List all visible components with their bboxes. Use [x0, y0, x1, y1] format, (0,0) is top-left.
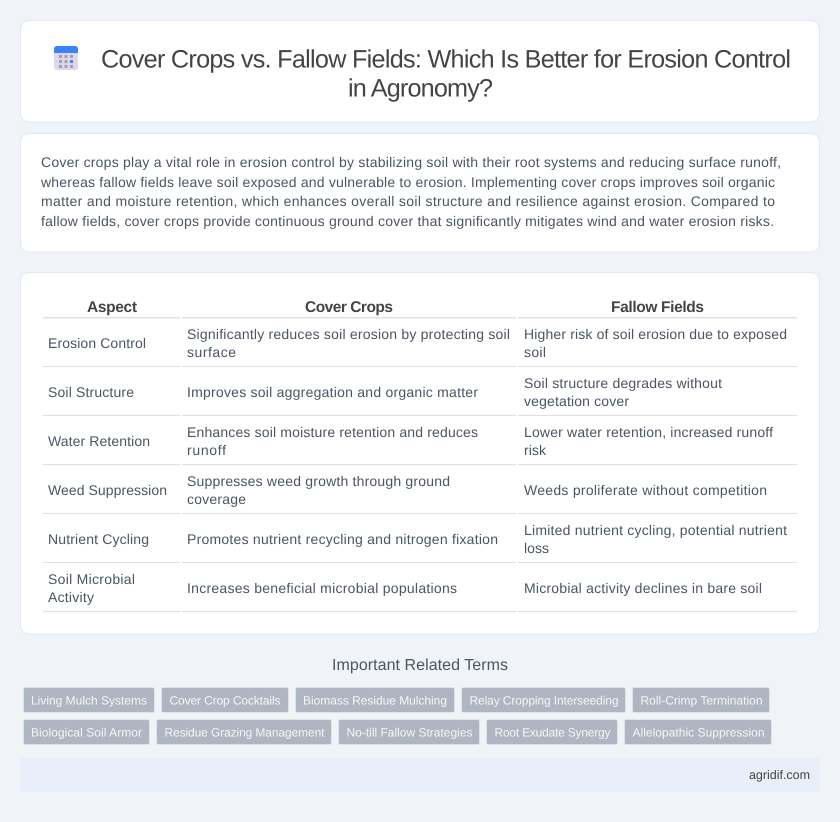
- chip: Root Exudate Synergy: [494, 726, 610, 740]
- chip: [486, 720, 618, 744]
- row: water retention: risk: [524, 442, 547, 458]
- row: nutrient cycling: [48, 522, 787, 556]
- chip: [162, 688, 288, 712]
- row: soil microbial activity: Activity: [48, 589, 94, 605]
- title: Cover Crops vs. Fallow Fields: Which Is Better for Erosion Control: [101, 46, 791, 74]
- row: weed suppression: Weeds proliferate without competition: [524, 482, 767, 498]
- table header row: Fallow Fields: [611, 299, 704, 316]
- row: water retention: [48, 424, 773, 458]
- chip: [24, 720, 150, 744]
- text block: description: whereas fallow fields leave soil exposed and vulnerable to erosion. Implementing cover crops improves soil organic: [40, 174, 775, 190]
- row: weed suppression: [48, 473, 767, 507]
- row: nutrient cycling: loss: [524, 540, 549, 556]
- row: erosion control: [48, 326, 787, 360]
- chip: [156, 720, 332, 744]
- chip: Roll-Crimp Termination: [640, 694, 762, 708]
- panel: comparison table: [20, 272, 820, 634]
- heading: related terms: Important Related Terms: [332, 657, 508, 674]
- row: nutrient cycling: Promotes nutrient recycling and nitrogen fixation: [187, 531, 498, 547]
- chip: Biomass Residue Mulching: [303, 694, 447, 708]
- row: soil microbial activity: Increases beneficial microbial populations: [187, 580, 457, 596]
- table header row: Cover Crops: [305, 299, 393, 316]
- text block: description: matter and moisture retention, which enhances overall soil structure and resilience against erosion. Compared to: [41, 193, 775, 209]
- row: weed suppression: Weed Suppression: [48, 482, 167, 498]
- row: water retention: Lower water retention, increased runoff: [524, 424, 773, 440]
- table rules: [43, 317, 797, 612]
- panel: header: [20, 20, 820, 122]
- row: soil structure: vegetation cover: [524, 393, 629, 409]
- chip: Relay Cropping Interseeding: [470, 694, 618, 708]
- table header row: Aspect: [87, 299, 137, 316]
- chip: [632, 688, 770, 712]
- row: soil microbial activity: [48, 571, 762, 605]
- row: soil structure: Soil Structure: [48, 384, 134, 400]
- icon: calendar: [54, 46, 78, 70]
- chip: [24, 688, 154, 712]
- row: nutrient cycling: Limited nutrient cycling, potential nutrient: [524, 522, 787, 538]
- chip: Allelopathic Suppression: [632, 726, 764, 740]
- chip: Biological Soil Armor: [31, 726, 142, 740]
- chip: [296, 688, 454, 712]
- row: soil structure: Improves soil aggregation and organic matter: [187, 384, 478, 400]
- row: water retention: Water Retention: [48, 433, 150, 449]
- chip: [338, 720, 480, 744]
- footer bar: [20, 758, 820, 792]
- row: weed suppression: coverage: [187, 491, 246, 507]
- table header row: [87, 299, 704, 316]
- text block: description: Cover crops play a vital role in erosion control by stabilizing soil with their root systems and reducing surface runoff,: [41, 154, 781, 170]
- row: soil microbial activity: Microbial activity declines in bare soil: [524, 580, 762, 596]
- row: water retention: Enhances soil moisture retention and reduces: [187, 424, 478, 440]
- text block: description: [40, 154, 781, 229]
- row: erosion control: Significantly reduces soil erosion by protecting soil: [187, 326, 510, 342]
- related term chips: [24, 688, 772, 744]
- row: soil microbial activity: Soil Microbial: [48, 571, 135, 587]
- chip: Residue Grazing Management: [164, 726, 325, 740]
- row: water retention: runoff: [187, 442, 226, 458]
- title: [101, 46, 791, 102]
- row: soil structure: Soil structure degrades without: [524, 375, 722, 391]
- row: weed suppression: Suppresses weed growth through ground: [187, 473, 450, 489]
- row: erosion control: surface: [187, 344, 236, 360]
- row: erosion control: Erosion Control: [48, 335, 146, 351]
- chip: [462, 688, 626, 712]
- panel: description: [20, 134, 820, 252]
- text block: description: fallow fields, cover crops provide continuous ground cover that significantly mitigates wind and water erosion risks.: [41, 213, 774, 229]
- title: in Agronomy?: [348, 74, 493, 102]
- row: erosion control: Higher risk of soil erosion due to exposed: [524, 326, 787, 342]
- chip: Living Mulch Systems: [31, 694, 147, 708]
- chip: No-till Fallow Strategies: [346, 726, 472, 740]
- footer source: agridif.com: [749, 768, 810, 782]
- row: soil structure: [48, 375, 722, 409]
- row: erosion control: soil: [524, 344, 546, 360]
- chip: [624, 720, 772, 744]
- row: nutrient cycling: Nutrient Cycling: [48, 531, 149, 547]
- chip: Cover Crop Cocktails: [170, 694, 280, 708]
